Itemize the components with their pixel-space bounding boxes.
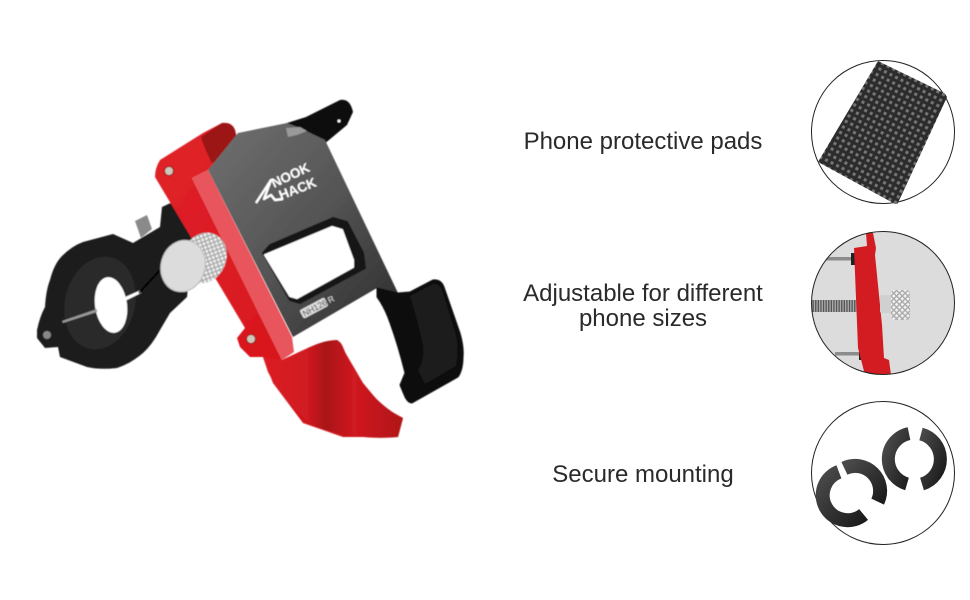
label: Adjustable for different (523, 280, 763, 307)
feature 1: phone protective pads (524, 60, 954, 205)
red frame (155, 123, 403, 437)
model label: NH126 (301, 297, 329, 319)
icon: textured pad (818, 61, 948, 205)
top red clip (201, 123, 239, 163)
infographic canvas (36, 60, 955, 545)
feature 2: adjustable for different phone sizes (523, 231, 955, 375)
logo wordmark: HACK (277, 175, 319, 203)
top black clip (287, 100, 353, 150)
label: Secure mounting (552, 461, 734, 488)
frame rivets (164, 166, 256, 344)
handlebar clamp (37, 200, 193, 369)
right black grip (377, 280, 463, 403)
icon: red frame close-up (810, 231, 955, 375)
plate window opening (265, 227, 353, 298)
product photo: phone mount (37, 100, 463, 438)
knurled adjustment knob (155, 225, 235, 297)
model label (299, 293, 336, 319)
icon: circle outline (812, 232, 954, 374)
icon: circle outline (812, 402, 954, 544)
logo wordmark: NOOK (269, 160, 312, 191)
plate window bevel (263, 218, 365, 303)
icon: rubber ring right (888, 434, 940, 484)
red hook shading (263, 340, 403, 438)
back plate (208, 123, 398, 337)
small top clip detail (286, 127, 307, 137)
feature 3: secure mounting (552, 402, 954, 544)
icon: rubber ring left (823, 466, 880, 520)
logo wordmark (269, 160, 319, 203)
light red strip (192, 170, 294, 360)
label: phone sizes (579, 305, 707, 332)
label: Phone protective pads (524, 128, 762, 155)
logo mark (256, 180, 283, 203)
icon: circle outline (812, 60, 954, 204)
model label: R (326, 293, 336, 305)
